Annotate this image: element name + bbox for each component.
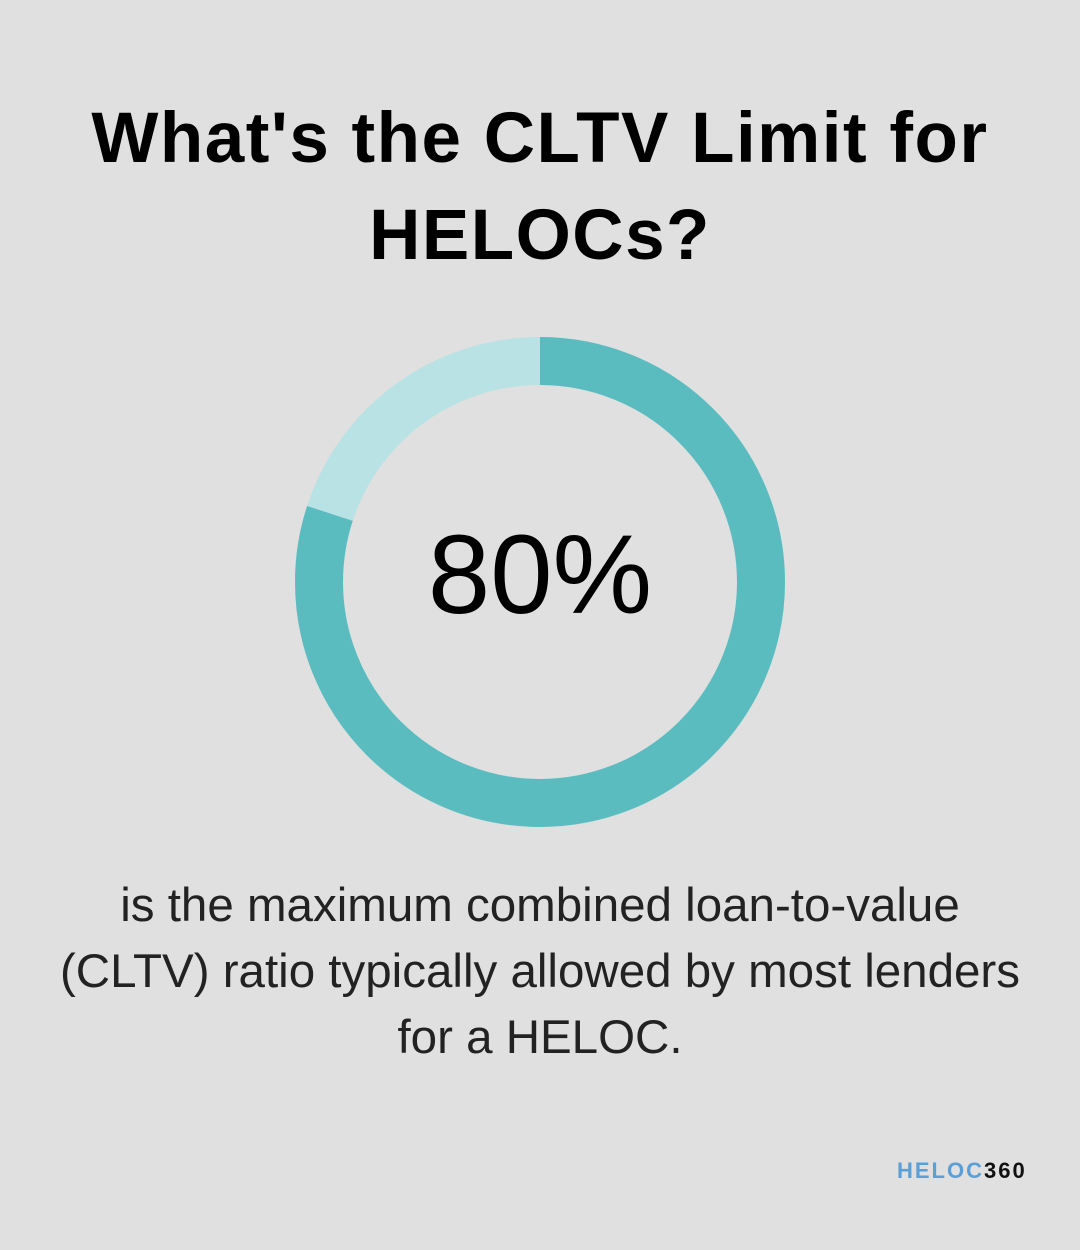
title: HELOCs? — [369, 196, 711, 275]
percentage: 80% — [428, 512, 652, 637]
title: What's the CLTV Limit for — [91, 99, 989, 178]
logo: HELOC360 — [897, 1158, 1027, 1183]
description: is the maximum combined loan-to-value — [120, 879, 960, 932]
donut chart — [295, 337, 785, 827]
title — [91, 99, 989, 275]
description: for a HELOC. — [397, 1011, 683, 1064]
description: (CLTV) ratio typically allowed by most lenders — [60, 945, 1020, 998]
description — [60, 879, 1020, 1064]
